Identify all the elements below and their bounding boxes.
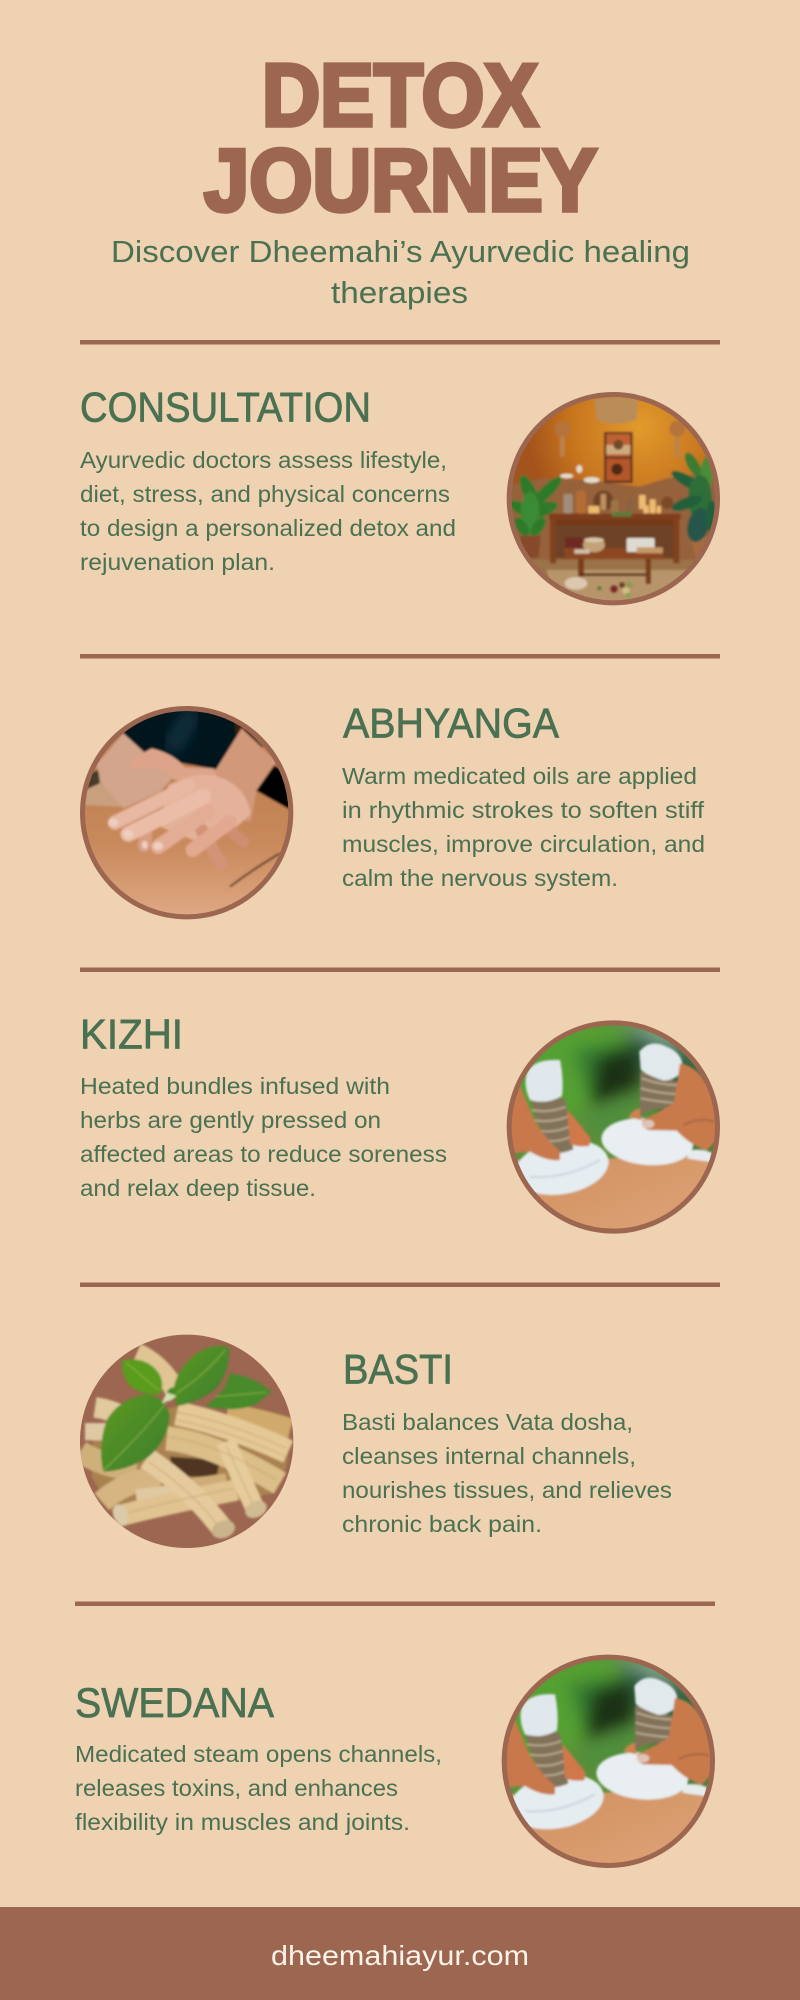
panel: kizhi — [80, 1010, 723, 1237]
image: massage hands — [80, 707, 293, 920]
text block: basti: Basti balances Vata dosha, — [342, 1409, 633, 1435]
text block: abhyanga: muscles, improve circulation, and — [342, 831, 705, 857]
text block: basti: cleanses internal channels, — [342, 1443, 636, 1469]
heading: swedana: SWEDANA — [75, 1679, 274, 1726]
text block: abhyanga: Warm medicated oils are applied — [342, 763, 697, 789]
panel: basti — [80, 1335, 672, 1548]
text block: abhyanga — [342, 763, 705, 891]
panel: swedana — [75, 1654, 718, 1871]
text block: consultation: rejuvenation plan. — [80, 549, 275, 575]
text block: consultation: to design a personalized detox and — [80, 515, 456, 541]
text block: abhyanga: in rhythmic strokes to soften stiff — [342, 797, 705, 823]
heading: consultation: CONSULTATION — [80, 384, 371, 430]
title: JOURNEY — [204, 130, 597, 230]
title — [204, 46, 597, 230]
heading: abhyanga: ABHYANGA — [343, 700, 559, 746]
text block: consultation: diet, stress, and physical concerns — [80, 481, 450, 507]
footer url: dheemahiayur.com — [271, 1940, 529, 1971]
text block: kizhi: and relax deep tissue. — [80, 1175, 316, 1201]
text block: basti: chronic back pain. — [342, 1511, 542, 1537]
text block: consultation: Ayurvedic doctors assess lifestyle, — [80, 447, 447, 473]
heading: kizhi: KIZHI — [80, 1010, 183, 1058]
panel: consultation — [80, 384, 720, 610]
text block: abhyanga: calm the nervous system. — [342, 865, 618, 891]
title: DETOX — [262, 46, 538, 144]
subtitle: therapies — [331, 275, 468, 310]
text block: kizhi: affected areas to reduce soreness — [80, 1141, 447, 1167]
right bundle — [599, 1114, 695, 1169]
text block: basti: nourishes tissues, and relieves — [342, 1477, 672, 1503]
panel: abhyanga — [80, 700, 705, 920]
footer — [0, 1907, 800, 2000]
text block: kizhi: herbs are gently pressed on — [80, 1107, 381, 1133]
left bundle — [510, 1133, 613, 1202]
heading: basti: BASTI — [343, 1346, 453, 1392]
text block: swedana — [75, 1741, 442, 1835]
subtitle: Discover Dheemahi’s Ayurvedic healing — [111, 234, 690, 269]
subtitle — [111, 234, 690, 310]
image: steam bundles — [502, 1654, 718, 1871]
text block: swedana: releases toxins, and enhances — [75, 1775, 398, 1801]
text block: swedana: Medicated steam opens channels, — [75, 1741, 442, 1767]
text block: kizhi: Heated bundles infused with — [80, 1073, 390, 1099]
image: spa room — [506, 390, 720, 610]
text block: swedana: flexibility in muscles and joints. — [75, 1809, 410, 1835]
image: herb roots and leaves — [80, 1335, 293, 1548]
text block: basti — [342, 1409, 672, 1537]
text block: kizhi — [80, 1073, 447, 1201]
text block: consultation — [80, 447, 456, 575]
image: herbal bundles — [507, 1020, 723, 1237]
